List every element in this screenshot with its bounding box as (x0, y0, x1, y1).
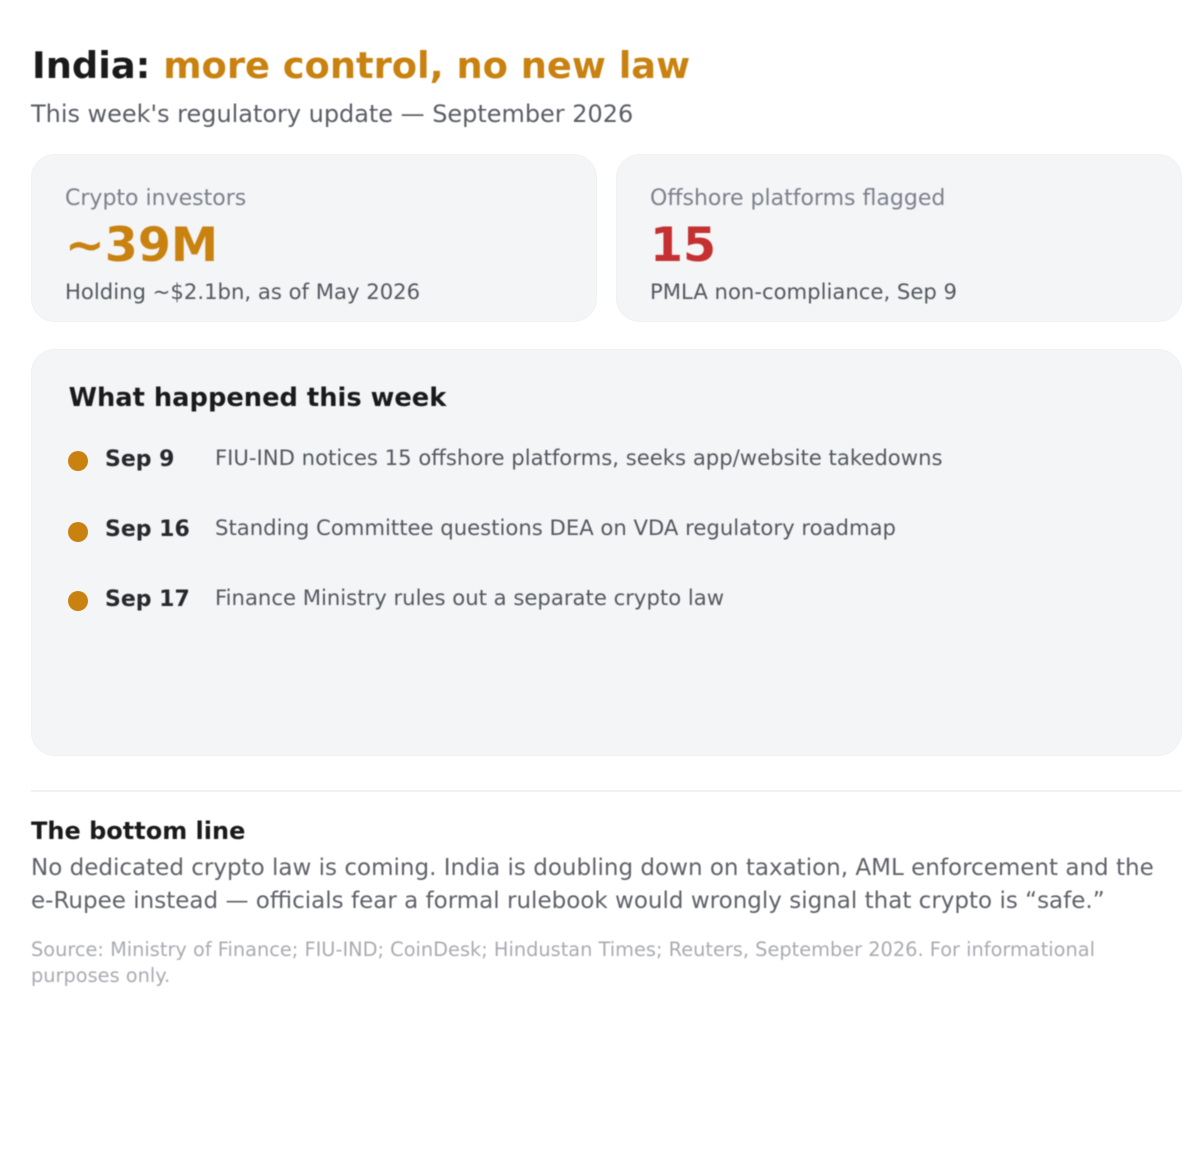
bottom line heading: The bottom line (31, 817, 245, 845)
stat note: PMLA non-compliance, Sep 9 (650, 279, 957, 304)
stat value: ~39M (65, 218, 218, 272)
source note: purposes only. (31, 964, 170, 987)
event: Standing Committee questions DEA on VDA regulatory roadmap (215, 514, 896, 540)
panel: what happened this week (31, 349, 1182, 756)
panel heading: What happened this week (69, 383, 446, 413)
event: Finance Ministry rules out a separate crypto law (215, 584, 724, 610)
date: Sep 9 (105, 447, 174, 472)
bottom line text (31, 855, 1154, 914)
stat note: Holding ~$2.1bn, as of May 2026 (65, 279, 420, 304)
timeline item: Sep 9 (68, 444, 943, 472)
panel: crypto investors (31, 154, 597, 322)
timeline item: Sep 17 (68, 584, 724, 612)
bullet (68, 591, 88, 611)
stat label: Crypto investors (65, 186, 246, 211)
timeline item: Sep 16 (68, 514, 896, 542)
bottom line text: e-Rupee instead — officials fear a formal rulebook would wrongly signal that crypto is “safe.” (31, 888, 1105, 914)
bottom line text: No dedicated crypto law is coming. India is doubling down on taxation, AML enforcement and the (31, 855, 1154, 881)
source note: Source: Ministry of Finance; FIU-IND; CoinDesk; Hindustan Times; Reuters, September 2026. For informational (31, 938, 1095, 961)
title: India: more control, no new law (32, 44, 690, 87)
panel: offshore platforms (616, 154, 1182, 322)
source note (31, 938, 1095, 987)
date: Sep 16 (105, 517, 190, 542)
bullet (68, 451, 88, 471)
date: Sep 17 (105, 587, 190, 612)
stat label: Offshore platforms flagged (650, 186, 945, 211)
event: FIU-IND notices 15 offshore platforms, seeks app/website takedowns (215, 444, 943, 470)
bullet (68, 522, 88, 542)
stat value: 15 (650, 218, 716, 272)
subtitle: This week's regulatory update — September 2026 (31, 100, 633, 128)
